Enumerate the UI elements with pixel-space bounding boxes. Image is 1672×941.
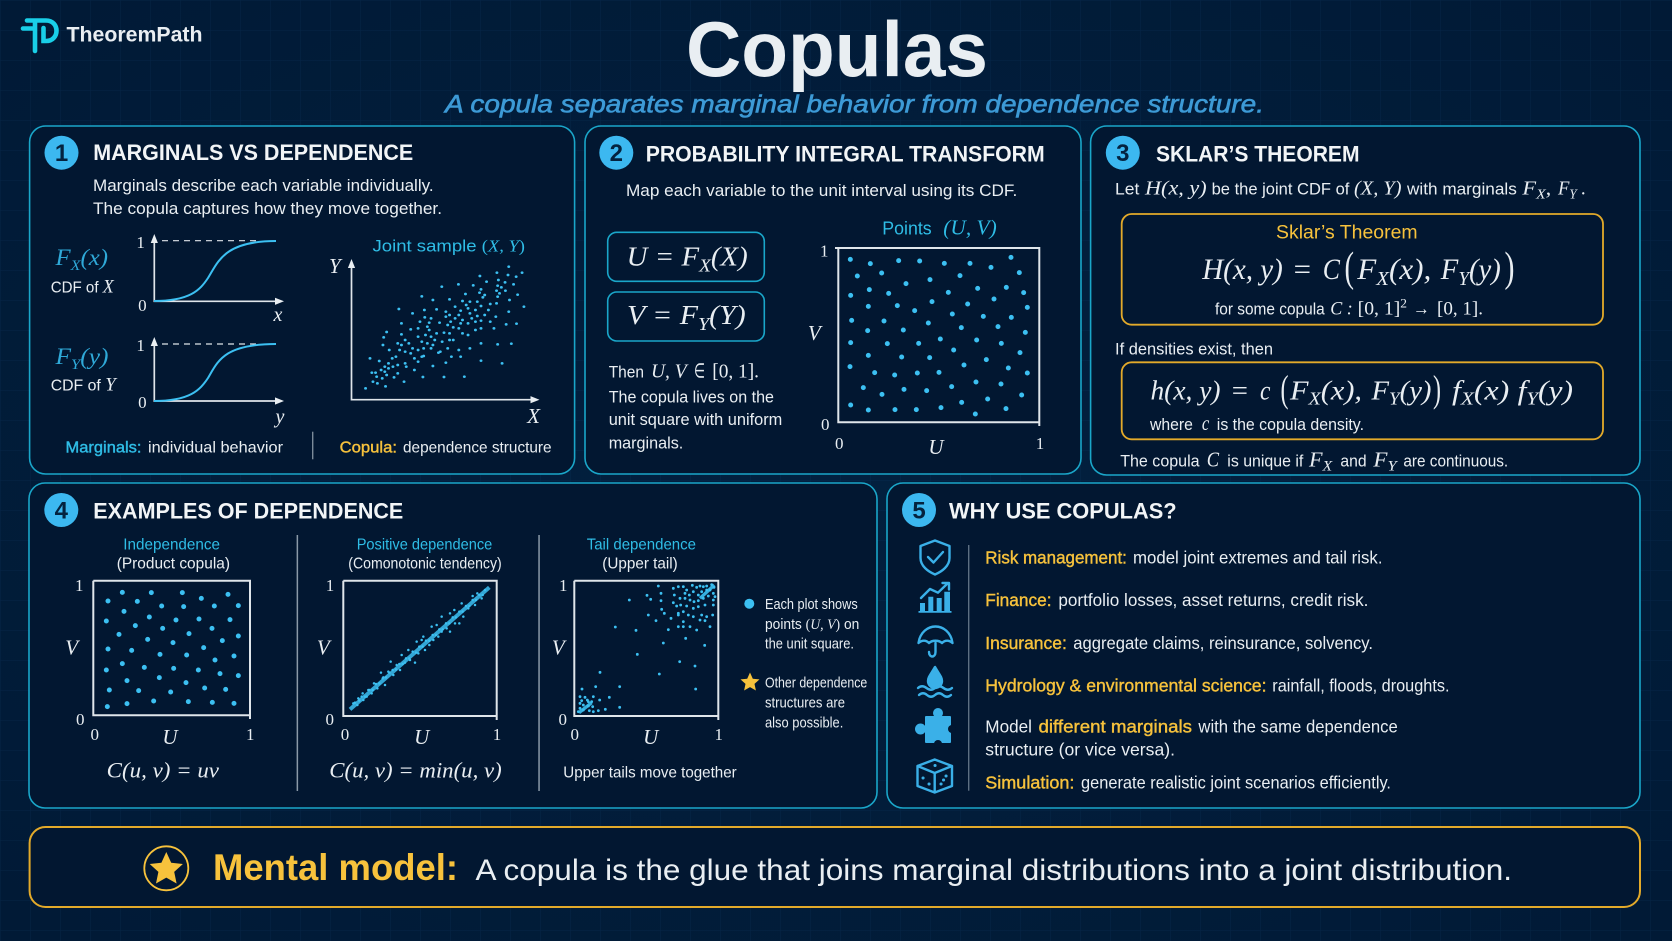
theorem box: → bbox=[1413, 298, 1430, 319]
legend bbox=[740, 597, 867, 731]
label: F_X(x) CDF of X bbox=[51, 245, 115, 298]
list: reasons: Finance: bbox=[985, 590, 1052, 610]
density box: f bbox=[1452, 375, 1460, 405]
chart: CDF of Y bbox=[136, 336, 285, 428]
badge 2 bbox=[599, 136, 633, 170]
density box: x) bbox=[1485, 375, 1508, 405]
intro line: X bbox=[1535, 187, 1546, 202]
badge 4 bbox=[44, 493, 78, 527]
intro text: The copula captures how they move together. bbox=[93, 199, 442, 218]
list: reasons: generate realistic joint scenarios efficiently. bbox=[1081, 772, 1391, 792]
chart: CDF of Y: 1 bbox=[136, 336, 145, 355]
label: F_X(x) CDF of X: X bbox=[70, 258, 81, 274]
density box: c bbox=[1260, 375, 1270, 405]
theorem box: F bbox=[1441, 253, 1459, 286]
density box: ( bbox=[1474, 375, 1487, 405]
chart: CDF of Y: 0 bbox=[138, 393, 147, 412]
density box: X bbox=[1307, 388, 1322, 408]
theorem box: for some copula bbox=[1215, 300, 1325, 318]
label: F_Y(y) CDF of Y: Y bbox=[71, 357, 82, 373]
badge 4: 4 bbox=[55, 497, 69, 524]
chart: positive dependence: 1 bbox=[493, 725, 501, 744]
list: reasons: structure (or vice versa). bbox=[985, 740, 1175, 760]
chart: points (U,V): U bbox=[928, 435, 945, 459]
uniqueness line: The copula bbox=[1120, 453, 1200, 471]
chart: independence: 1 bbox=[246, 725, 255, 744]
chart: tail dependence: (Upper tail) bbox=[602, 555, 678, 572]
legend: Each plot shows bbox=[765, 597, 858, 613]
label: F_X(x) CDF of X: CDF of X bbox=[51, 277, 115, 298]
density box: F bbox=[1290, 375, 1306, 405]
legend: the unit square. bbox=[765, 636, 854, 652]
chart: positive dependence: (Comonotonic tendency) bbox=[348, 555, 502, 572]
density box: is the copula density. bbox=[1217, 416, 1364, 434]
explanation text: ∈ bbox=[694, 361, 705, 383]
theorem box: F bbox=[1357, 253, 1376, 286]
badge 1: 1 bbox=[55, 140, 68, 167]
theorem box: ( bbox=[1469, 253, 1480, 286]
explanation text: marginals. bbox=[609, 433, 683, 452]
chart: tail dependence: 1 bbox=[714, 725, 723, 744]
chart: positive dependence bbox=[317, 536, 502, 782]
intro line: H(x, y) bbox=[1144, 177, 1207, 199]
theorem box: ) bbox=[1504, 245, 1514, 291]
intro text: Map each variable to the unit interval using its CDF. bbox=[626, 181, 1017, 200]
icon: star badge bbox=[144, 846, 188, 890]
theorem box: x), bbox=[1399, 253, 1431, 286]
panel 3: Sklar's theorem bbox=[1091, 126, 1640, 475]
icon: chart bbox=[918, 583, 952, 613]
intro line: (X, Y) bbox=[1354, 177, 1402, 199]
formula box: U: U = F bbox=[627, 241, 697, 271]
chart: positive dependence: 1 bbox=[326, 576, 334, 595]
list: reasons bbox=[985, 547, 1450, 792]
label: F_X(x) CDF of X: F bbox=[56, 245, 70, 270]
density box: ( bbox=[1280, 368, 1288, 410]
theorem box: Sklar’s Theorem bbox=[1276, 222, 1418, 243]
chart: independence: 1 bbox=[75, 576, 84, 595]
explanation text: U, V bbox=[651, 361, 689, 383]
callout text: Mental model: bbox=[213, 847, 458, 888]
legend: also possible. bbox=[765, 715, 843, 731]
intro text bbox=[93, 176, 442, 218]
chart: independence: V bbox=[65, 635, 80, 659]
theorem box: ( bbox=[1389, 253, 1401, 286]
title: Copulas bbox=[686, 5, 988, 93]
list: reasons: aggregate claims, reinsurance, solvency. bbox=[1073, 633, 1373, 653]
density box: c bbox=[1202, 413, 1209, 435]
uniqueness line: C bbox=[1207, 448, 1220, 472]
chart: independence bbox=[65, 536, 255, 782]
formula box: V: V = F bbox=[627, 300, 696, 330]
badge 2: 2 bbox=[610, 140, 623, 167]
density box: f bbox=[1518, 375, 1525, 405]
theorem box bbox=[1122, 214, 1603, 325]
panel 5: why use copulas bbox=[887, 483, 1640, 808]
badge 3 bbox=[1106, 136, 1140, 170]
heading: WHY USE COPULAS? bbox=[949, 498, 1177, 523]
chart: positive dependence: C(u, v) = min(u, v) bbox=[329, 757, 502, 782]
label: F_Y(y) CDF of Y: F bbox=[56, 344, 70, 369]
intro line: Let bbox=[1115, 180, 1140, 198]
chart: joint sample scatter: Y bbox=[329, 254, 343, 278]
caption: marginals and copula: Copula: bbox=[340, 439, 397, 456]
chart: independence: U bbox=[162, 725, 179, 749]
panel 1: marginals vs dependence bbox=[30, 126, 575, 474]
list: reasons: Hydrology & environmental science: bbox=[985, 676, 1266, 696]
theorem box: 2 bbox=[1400, 295, 1407, 310]
caption: marginals and copula: dependence structure bbox=[403, 439, 552, 456]
density box: ( bbox=[1321, 375, 1333, 405]
list: reasons: Simulation: bbox=[985, 772, 1074, 792]
theorem box: X bbox=[1375, 268, 1390, 290]
explanation text: [0, 1]. bbox=[712, 361, 759, 383]
label: F_Y(y) CDF of Y: CDF of Y bbox=[51, 375, 118, 396]
list: reasons: model joint extremes and tail risk. bbox=[1133, 547, 1382, 567]
intro line: . bbox=[1577, 177, 1586, 199]
density box: where bbox=[1149, 416, 1193, 434]
chart: tail dependence: Upper tails move together bbox=[563, 764, 737, 781]
chart: points (U,V): Points bbox=[882, 218, 932, 238]
caption: marginals and copula bbox=[66, 432, 552, 459]
density box: = bbox=[1232, 375, 1248, 405]
density box: y) bbox=[1409, 375, 1431, 405]
chart: tail dependence: U bbox=[643, 725, 660, 749]
caption: marginals and copula: individual behavior bbox=[148, 439, 284, 456]
uniqueness line: and bbox=[1340, 453, 1367, 471]
intro line: be the joint CDF of bbox=[1212, 180, 1350, 198]
chart: CDF of X: x bbox=[273, 304, 283, 326]
chart: positive dependence: 0 bbox=[341, 725, 349, 744]
badge 5 bbox=[902, 493, 936, 527]
uniqueness line: F bbox=[1309, 448, 1322, 472]
list: reasons: Model bbox=[985, 717, 1032, 737]
explanation text: The copula lives on the bbox=[609, 388, 774, 407]
label: F_X(x) CDF of X: x) bbox=[89, 245, 107, 270]
chart: points (U,V) bbox=[808, 215, 1044, 459]
chart: CDF of X: 0 bbox=[138, 296, 147, 315]
icon: dice bbox=[918, 760, 952, 792]
chart: tail dependence: Tail dependence bbox=[587, 536, 696, 553]
list: reasons: with the same dependence bbox=[1197, 717, 1398, 737]
formula box: U: ( bbox=[711, 241, 723, 271]
intro line bbox=[1115, 177, 1586, 202]
panel 2: probability integral transform bbox=[585, 126, 1081, 474]
formula box: U bbox=[608, 232, 764, 281]
chart: points (U,V): 0 bbox=[835, 434, 844, 453]
chart: CDF of X: 1 bbox=[136, 233, 145, 252]
explanation text: unit square with uniform bbox=[609, 410, 782, 429]
chart: joint sample scatter: Joint sample (X, Y) bbox=[372, 237, 525, 256]
formula box: V: Y) bbox=[719, 300, 745, 330]
chart: CDF of Y: y bbox=[274, 406, 285, 428]
density box: y) bbox=[1549, 375, 1572, 405]
density box: ( bbox=[1538, 375, 1551, 405]
callout text: A copula is the glue that joins marginal distributions into a joint distribution. bbox=[476, 854, 1512, 887]
chart: independence: Independence bbox=[123, 536, 220, 553]
density box bbox=[1122, 362, 1603, 439]
uniqueness line: is unique if bbox=[1227, 453, 1304, 471]
density box: h(x, y) bbox=[1150, 375, 1220, 405]
intro line: F bbox=[1558, 177, 1570, 199]
label: F_Y(y) CDF of Y bbox=[51, 344, 118, 396]
chart: independence: 0 bbox=[90, 725, 99, 744]
legend: structures are bbox=[765, 695, 845, 711]
chart: positive dependence: 0 bbox=[325, 710, 334, 729]
chart: points (U,V): (U, V) bbox=[943, 215, 997, 239]
chart: tail dependence: V bbox=[552, 635, 567, 659]
icon: puzzle bbox=[915, 708, 956, 748]
chart: tail dependence: 0 bbox=[570, 725, 579, 744]
theorem box: H(x, y) bbox=[1201, 253, 1283, 286]
theorem box: [0, 1]. bbox=[1437, 298, 1483, 319]
list: reasons: portfolio losses, asset returns, credit risk. bbox=[1058, 590, 1368, 610]
callout text bbox=[213, 847, 1512, 888]
subtitle: A copula separates marginal behavior from dependence structure. bbox=[443, 90, 1264, 118]
formula box: U: X) bbox=[720, 241, 747, 271]
label: F_X(x) CDF of X: ( bbox=[80, 245, 90, 270]
badge 5: 5 bbox=[912, 497, 926, 524]
chart: CDF of X bbox=[136, 233, 284, 326]
chart: tail dependence bbox=[552, 536, 737, 781]
intro text: Marginals describe each variable individually. bbox=[93, 176, 434, 195]
uniqueness line: are continuous. bbox=[1403, 453, 1508, 471]
uniqueness line: Y bbox=[1387, 459, 1398, 475]
density box: Y bbox=[1526, 388, 1540, 408]
formula box: V: Y bbox=[698, 314, 711, 334]
intro line: Y bbox=[1569, 187, 1579, 202]
icon: shield bbox=[920, 540, 950, 574]
uniqueness line: X bbox=[1321, 459, 1333, 475]
intro line: with marginals bbox=[1406, 180, 1517, 198]
density box: Y bbox=[1389, 388, 1402, 408]
chart: points (U,V): V bbox=[808, 321, 823, 345]
chart: tail dependence: 1 bbox=[559, 576, 568, 595]
banner: mental model bbox=[30, 827, 1640, 907]
chart: points (U,V): 0 bbox=[821, 415, 830, 434]
icon: umbrella bbox=[918, 626, 952, 656]
density box: x), bbox=[1331, 375, 1360, 405]
chart: positive dependence: U bbox=[414, 725, 431, 749]
legend: points (U, V) on bbox=[765, 617, 859, 633]
explanation text bbox=[609, 361, 782, 452]
theorem box: C bbox=[1323, 253, 1341, 286]
list: reasons: different marginals bbox=[1038, 717, 1192, 737]
intro line: F bbox=[1522, 177, 1535, 199]
formula box: V: ( bbox=[709, 300, 721, 330]
formula box: V bbox=[608, 292, 764, 341]
heading: MARGINALS VS DEPENDENCE bbox=[93, 140, 413, 165]
badge 3: 3 bbox=[1116, 140, 1129, 167]
density box: ( bbox=[1400, 375, 1411, 405]
heading: SKLAR’S THEOREM bbox=[1156, 142, 1360, 166]
intro line: , bbox=[1546, 177, 1551, 199]
uniqueness line: F bbox=[1373, 448, 1386, 472]
density box: ) bbox=[1433, 368, 1441, 410]
densities line: If densities exist, then bbox=[1115, 340, 1273, 358]
density box: F bbox=[1372, 375, 1388, 405]
theorem box: [0, 1] bbox=[1358, 298, 1399, 319]
label: F_Y(y) CDF of Y: y) bbox=[89, 344, 108, 369]
theorem box: Y bbox=[1458, 268, 1471, 290]
chart: independence: 0 bbox=[76, 710, 85, 729]
theorem box: C : bbox=[1330, 298, 1353, 319]
legend: Other dependence bbox=[765, 675, 867, 691]
chart: independence: C(u, v) = uv bbox=[107, 757, 219, 782]
panel 4: examples of dependence bbox=[29, 483, 877, 808]
theorem box: ( bbox=[1344, 245, 1354, 291]
logo: TheoremPath bbox=[23, 20, 202, 51]
chart: positive dependence: Positive dependence bbox=[357, 536, 492, 553]
list: reasons: Risk management: bbox=[985, 547, 1127, 567]
chart: independence: (Product copula) bbox=[117, 555, 230, 572]
logo: TheoremPath: TheoremPath bbox=[66, 22, 202, 46]
chart: points (U,V): 1 bbox=[820, 242, 829, 261]
chart: joint sample scatter: X bbox=[526, 404, 541, 428]
list: reasons: rainfall, floods, droughts. bbox=[1272, 676, 1450, 696]
badge 1 bbox=[44, 136, 78, 170]
theorem box: = bbox=[1294, 253, 1311, 286]
theorem box: y) bbox=[1479, 253, 1501, 286]
density box: X bbox=[1460, 388, 1475, 408]
caption: marginals and copula: Marginals: bbox=[66, 439, 142, 456]
chart: joint sample scatter bbox=[329, 237, 541, 428]
list: reasons: Insurance: bbox=[985, 633, 1067, 653]
uniqueness line bbox=[1120, 448, 1508, 475]
formula box: U: X bbox=[698, 255, 712, 275]
icon: water drop bbox=[918, 667, 952, 697]
explanation text: Then bbox=[609, 363, 644, 382]
chart: tail dependence: 0 bbox=[558, 710, 567, 729]
heading: EXAMPLES OF DEPENDENCE bbox=[93, 498, 403, 523]
chart: points (U,V): 1 bbox=[1036, 434, 1044, 453]
label: F_Y(y) CDF of Y: ( bbox=[80, 344, 90, 369]
heading: PROBABILITY INTEGRAL TRANSFORM bbox=[646, 142, 1045, 167]
chart: positive dependence: V bbox=[317, 635, 332, 659]
